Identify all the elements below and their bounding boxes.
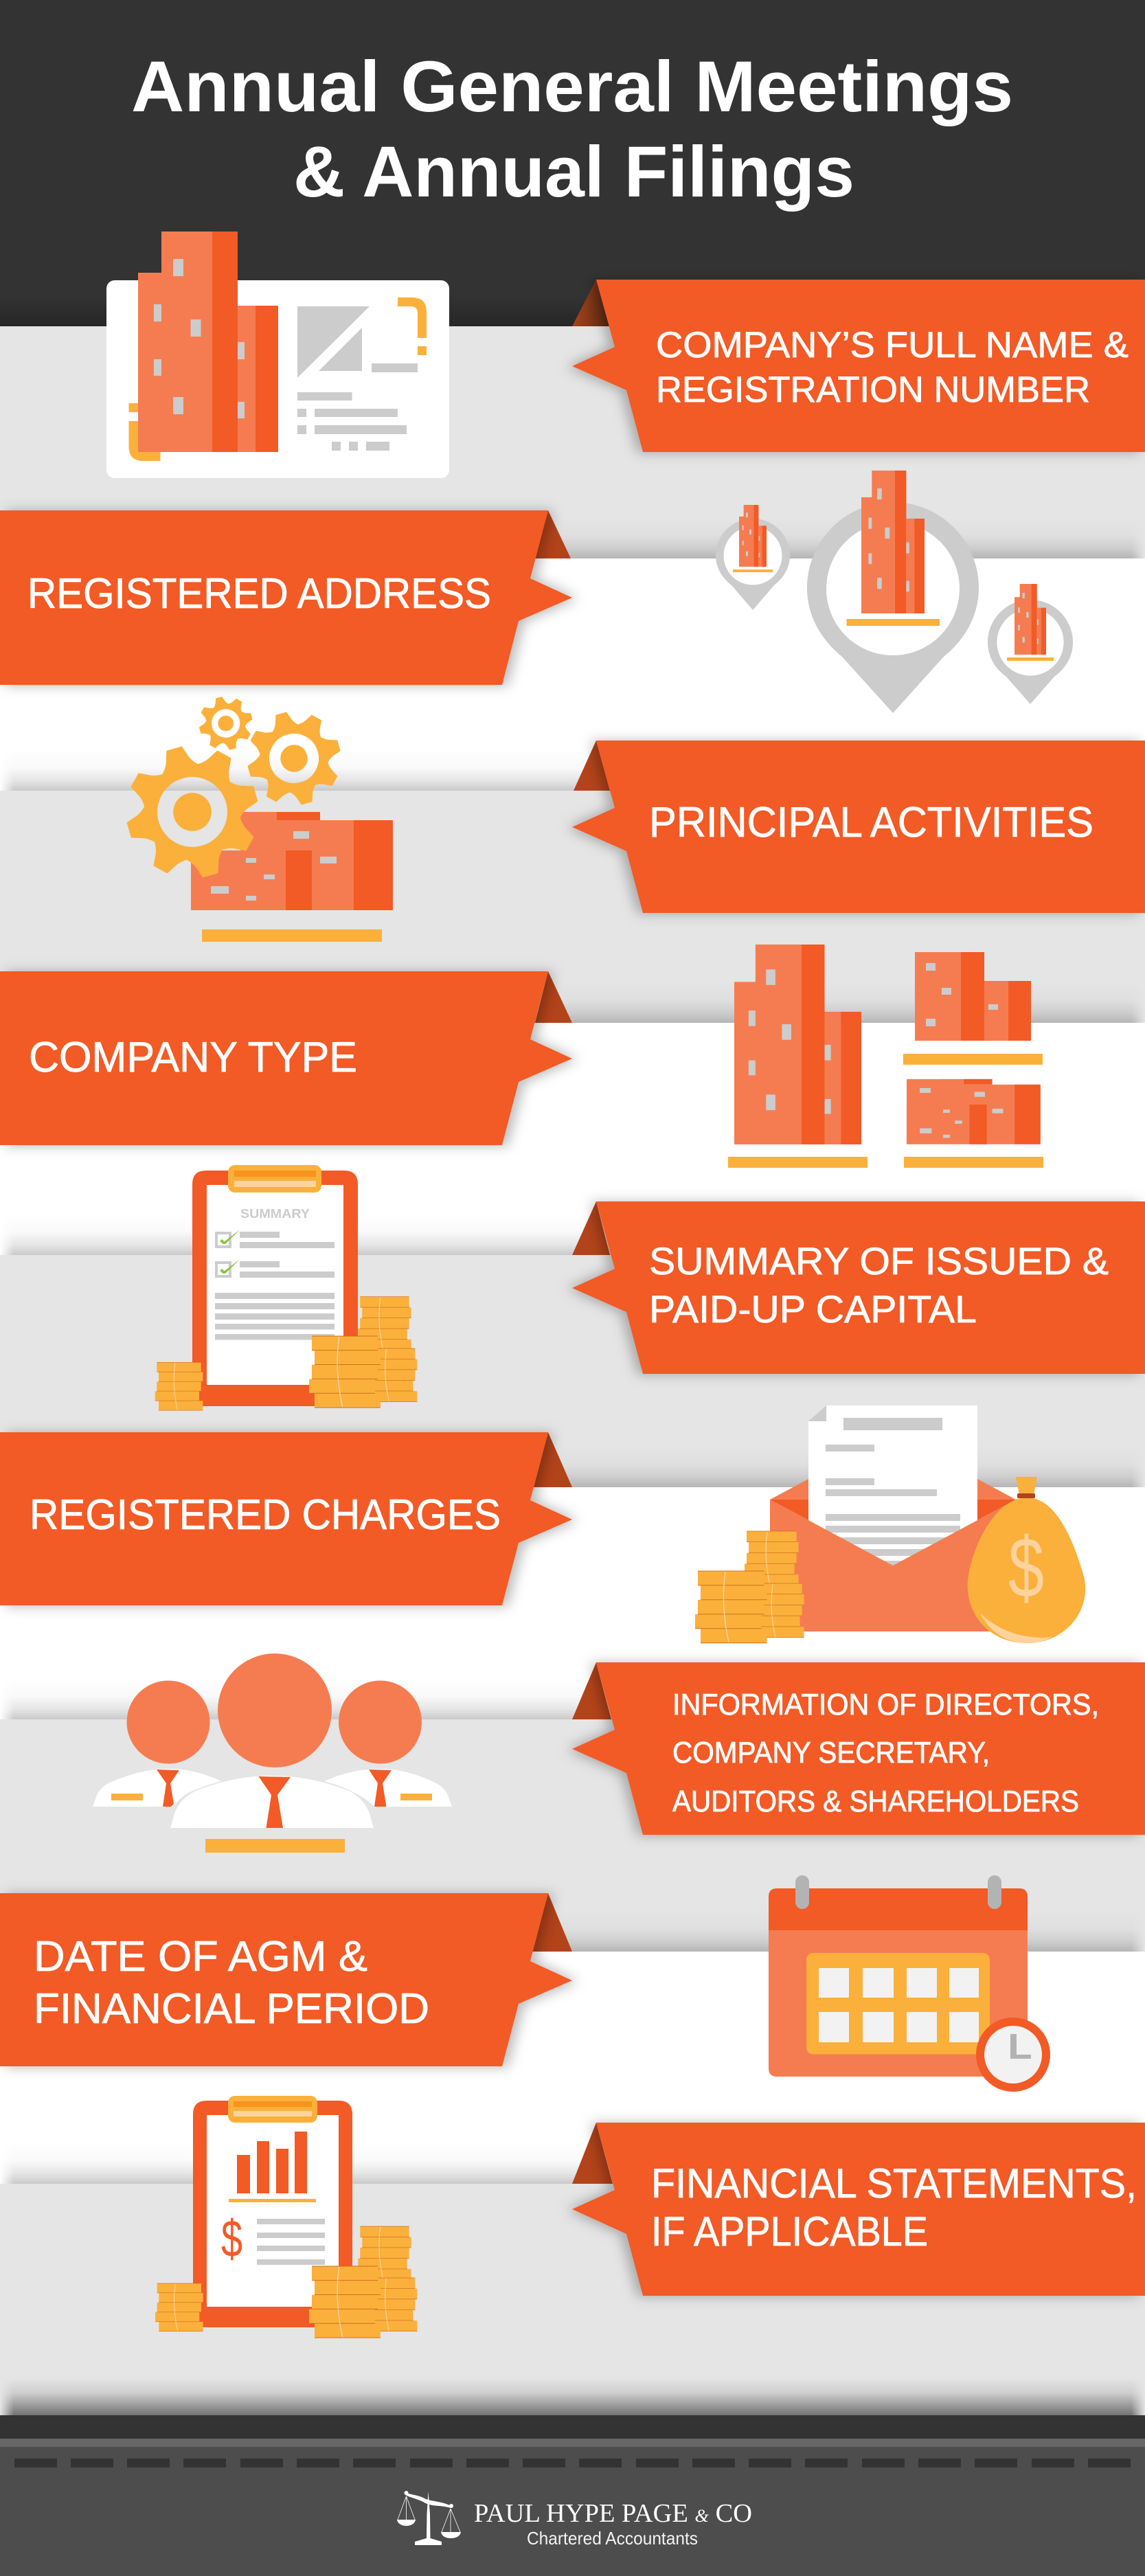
checklist: [216, 1230, 335, 1278]
banner: company name: COMPANY’S FULL NAME &: [656, 325, 1129, 365]
banner: information of directors: INFORMATION OF DIRECTORS,: [672, 1688, 1099, 1721]
icon: envelope, document, money bag and coins: [695, 1405, 1085, 1643]
banner: information of directors: [572, 1662, 1145, 1835]
banner: financial statements: IF APPLICABLE: [651, 2208, 928, 2255]
coin stacks: [155, 2226, 417, 2338]
building: upper right: [915, 952, 1031, 1041]
icon: three people: [93, 1653, 452, 1853]
icon: location pins with buildings: [716, 471, 1073, 713]
banner: financial statements: [572, 2123, 1145, 2296]
icon: calendar with clock: [769, 1875, 1050, 2092]
building: lower right factory: [907, 1079, 1041, 1144]
icon: summary clipboard with coins: SUMMARY: [240, 1206, 310, 1221]
banner: company type: COMPANY TYPE: [29, 1034, 357, 1081]
banner: information of directors: AUDITORS & SHAREHOLDERS: [672, 1785, 1079, 1818]
logo text: Chartered Accountants: [527, 2528, 698, 2549]
icon: financial report clipboard with coins: [155, 2096, 417, 2338]
banner: date of AGM: [0, 1893, 572, 2066]
banner: company name: REGISTRATION NUMBER: [656, 370, 1090, 410]
icon: three company buildings: [728, 945, 1043, 1168]
banner: company type: [0, 971, 572, 1145]
coin stacks: [155, 1296, 417, 1410]
title: & Annual Filings: [293, 132, 854, 212]
clock: [976, 2018, 1050, 2092]
banner: financial statements: FINANCIAL STATEMENTS,: [651, 2160, 1137, 2206]
banner: date of AGM: FINANCIAL PERIOD: [34, 1985, 429, 2033]
icon: gears and factory: [111, 690, 393, 942]
money bag: $: [1008, 1521, 1044, 1616]
banner: registered address: [0, 510, 572, 685]
title: Annual General Meetings: [131, 47, 1013, 127]
bar chart: [229, 2132, 316, 2202]
money bag: [968, 1477, 1085, 1643]
pin: small right: [988, 584, 1073, 704]
icon: financial report clipboard with coins: $: [221, 2210, 242, 2268]
banner: registered charges: REGISTERED CHARGES: [30, 1491, 501, 1539]
icon: summary clipboard with coins: [155, 1165, 417, 1410]
banner: registered charges: [0, 1432, 572, 1605]
banner: information of directors: COMPANY SECRETARY,: [672, 1736, 990, 1770]
banner: summary of issued capital: PAID-UP CAPITAL: [649, 1287, 977, 1331]
banner: principal activities: PRINCIPAL ACTIVITIES: [649, 799, 1093, 846]
icon: business card with building: [106, 231, 449, 478]
document: [808, 1405, 977, 1566]
logo text: PAUL HYPE PAGE & CO: [474, 2499, 752, 2528]
pin: large centre: [807, 471, 979, 713]
banner: summary of issued capital: SUMMARY OF ISSUED &: [649, 1239, 1109, 1283]
logo text: [474, 2499, 752, 2549]
banner: date of AGM: DATE OF AGM &: [34, 1933, 367, 1980]
pin: small left: [716, 505, 790, 610]
banner: company name: [572, 280, 1145, 452]
coin stacks: [695, 1531, 804, 1643]
banner: summary of issued capital: [572, 1201, 1145, 1374]
banner: registered address: REGISTERED ADDRESS: [27, 570, 491, 618]
banner: principal activities: [572, 741, 1145, 913]
footer road: [0, 2415, 1145, 2576]
logo: scales of justice: [397, 2491, 461, 2545]
title: [131, 47, 1013, 212]
